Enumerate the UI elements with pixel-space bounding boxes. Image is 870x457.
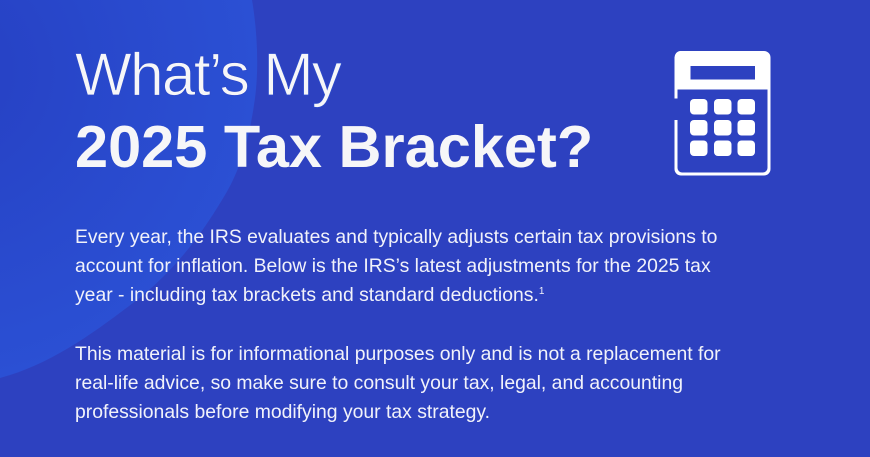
title line: What's My: What’s My bbox=[75, 41, 340, 108]
text block: introduction: account for inflation. Below is the IRS’s latest adjustments for the 2025 tax bbox=[75, 255, 711, 277]
title bbox=[75, 41, 593, 180]
text block: disclaimer: This material is for informational purposes only and is not a replacement for bbox=[75, 343, 721, 365]
text block: introduction bbox=[75, 226, 717, 306]
title line: 2025 Tax Bracket?: 2025 Tax Bracket? bbox=[75, 113, 593, 180]
text block: introduction: Every year, the IRS evaluates and typically adjusts certain tax provisions to bbox=[75, 226, 717, 248]
text block: disclaimer bbox=[75, 343, 721, 423]
text block: introduction: year - including tax brackets and standard deductions.1 bbox=[75, 284, 544, 306]
text block: disclaimer: professionals before modifying your tax strategy. bbox=[75, 401, 490, 423]
icon: calculator bbox=[674, 51, 770, 176]
text block: disclaimer: real-life advice, so make sure to consult your tax, legal, and accounting bbox=[75, 372, 683, 394]
